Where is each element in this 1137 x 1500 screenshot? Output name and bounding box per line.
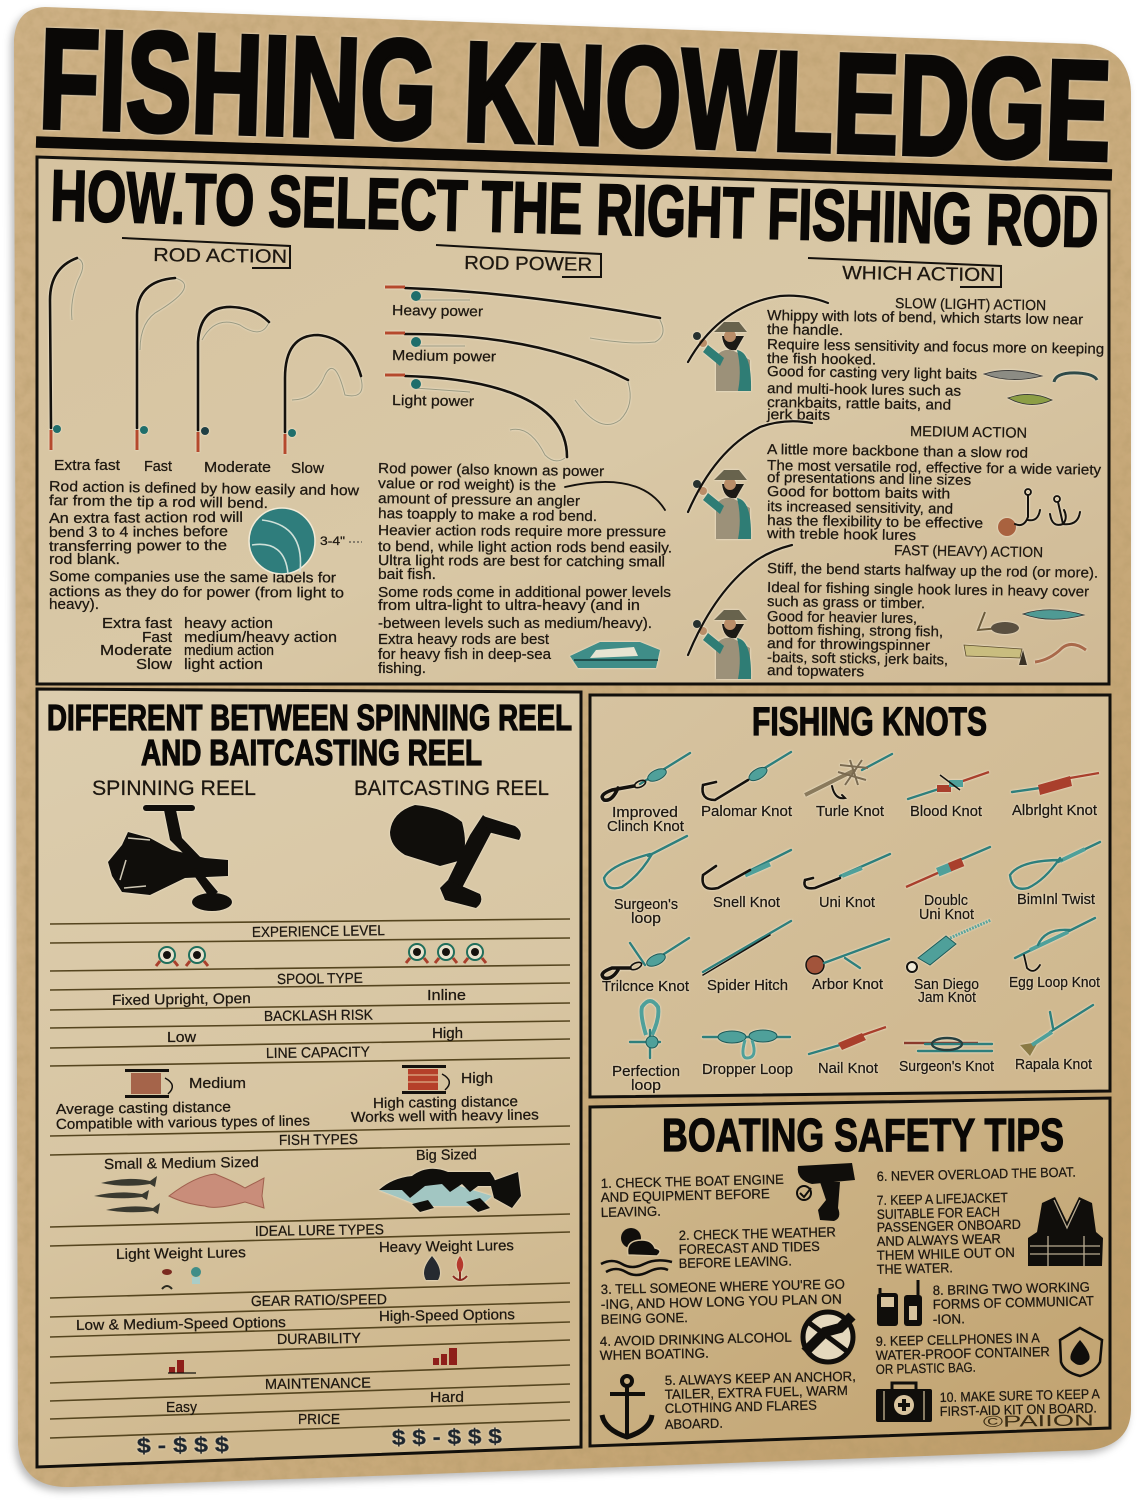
knot: improved clinch: Clinch Knot bbox=[607, 819, 684, 835]
knot: surgeon's loop bbox=[604, 836, 687, 927]
knot: arbor bbox=[806, 939, 889, 993]
knot: spider hitch bbox=[703, 921, 791, 994]
tip 7: AND ALWAYS WEAR bbox=[877, 1231, 1001, 1249]
text: rod power description: Some rods come in additional power levels bbox=[378, 585, 671, 601]
knot: palomar bbox=[701, 752, 792, 820]
row: price: $ $ - $ $ $ bbox=[392, 1425, 502, 1450]
panel: fishing knots bbox=[590, 695, 1110, 1097]
sub-panel: rod action bbox=[49, 238, 362, 673]
knot: rapala bbox=[1015, 1005, 1093, 1073]
row: ideal lure types bbox=[116, 1222, 514, 1289]
icon: medals bbox=[156, 944, 486, 966]
tip 7: SUITABLE FOR EACH bbox=[877, 1204, 1000, 1222]
tip 3: -ING, AND HOW LONG YOU PLAN ON bbox=[601, 1292, 842, 1312]
knot: egg loop: Egg Loop Knot bbox=[1009, 975, 1100, 991]
row: line capacity: Average casting distance bbox=[56, 1100, 231, 1118]
knot: bimini twist bbox=[1010, 842, 1100, 908]
knot: palomar: Palomar Knot bbox=[701, 804, 792, 820]
text: slow action: jerk baits bbox=[766, 407, 830, 424]
row: line capacity: LINE CAPACITY bbox=[266, 1045, 370, 1062]
icon: anchor bbox=[602, 1376, 652, 1437]
knot: surgeon's bbox=[899, 1038, 994, 1075]
row: line capacity: High casting distance bbox=[373, 1094, 518, 1112]
text: rod action description: Some companies use the same labels for bbox=[49, 569, 336, 587]
knot: snell bbox=[703, 850, 791, 911]
tip 7: PASSENGER ONBOARD bbox=[877, 1217, 1021, 1235]
tip 7 bbox=[877, 1190, 1103, 1277]
tip 9: 9. KEEP CELLPHONES IN A bbox=[876, 1330, 1040, 1349]
knot: san diego jam bbox=[907, 920, 991, 1006]
tip 2 bbox=[601, 1224, 836, 1275]
knot: nail bbox=[809, 1027, 886, 1077]
text: rod power description: fishing. bbox=[378, 661, 426, 677]
tip 2: FORECAST AND TIDES bbox=[679, 1239, 820, 1257]
knot: egg loop bbox=[1009, 918, 1100, 991]
row: spool type: SPOOL TYPE bbox=[277, 971, 363, 988]
panel: spinning vs baitcasting reel bbox=[37, 689, 581, 1467]
icon: spinning reel bbox=[108, 805, 232, 911]
rod labels: Slow bbox=[291, 461, 325, 477]
table: action equivalents bbox=[100, 616, 337, 673]
knot: double uni: Uni Knot bbox=[919, 907, 974, 923]
row: line capacity: Medium bbox=[189, 1076, 246, 1092]
icon: outboard motor bbox=[797, 1163, 855, 1221]
text: medium action: with treble hook lures bbox=[766, 526, 916, 544]
tip 2: BEFORE LEAVING. bbox=[679, 1253, 792, 1271]
tip 10 bbox=[876, 1383, 1100, 1422]
row: durability: DURABILITY bbox=[277, 1331, 361, 1348]
tip 5: TAILER, EXTRA FUEL, WARM bbox=[665, 1383, 848, 1402]
text: rod power description: -between levels such as medium/heavy). bbox=[378, 616, 652, 632]
knot: rapala: Rapala Knot bbox=[1015, 1057, 1092, 1073]
knot: nail: Nail Knot bbox=[818, 1061, 878, 1077]
chart: four bending rods bbox=[50, 258, 362, 454]
row: maintenance bbox=[166, 1376, 464, 1416]
knot: snell: Snell Knot bbox=[713, 895, 780, 911]
row: ideal lure types: IDEAL LURE TYPES bbox=[255, 1222, 384, 1240]
text: rod action description: Rod action is defined by how easily and how bbox=[49, 479, 360, 499]
knot: double uni bbox=[906, 847, 990, 923]
icon: heavy cover lures bbox=[964, 610, 1086, 665]
tip 5: CLOTHING AND FLARES bbox=[665, 1398, 817, 1416]
row: price bbox=[137, 1412, 502, 1458]
tip 8: -ION. bbox=[933, 1311, 965, 1327]
knot: turle bbox=[805, 754, 892, 820]
knot: albright: Albrlght Knot bbox=[1012, 803, 1097, 819]
tip 6: 6. NEVER OVERLOAD THE BOAT. bbox=[877, 1164, 1076, 1184]
text: rod action description: heavy). bbox=[49, 597, 99, 613]
watermark: Paiion copyright: ©PAIION bbox=[983, 1412, 1094, 1431]
row: experience level: EXPERIENCE LEVEL bbox=[252, 923, 385, 941]
icon: small rod illustration bbox=[565, 482, 665, 510]
text: rod power description: Heavier action rods require more pressure bbox=[378, 523, 666, 541]
tip 3: 3. TELL SOMEONE WHERE YOU'RE GO bbox=[601, 1276, 845, 1297]
knot: blood bbox=[908, 772, 989, 820]
sub-panel: rod power bbox=[378, 245, 672, 677]
text: slow action: crankbaits, rattle baits, and bbox=[767, 395, 951, 414]
heading: different between reels bbox=[47, 697, 572, 773]
row: gear ratio: Low & Medium-Speed Options bbox=[76, 1315, 286, 1334]
icon: high spool bbox=[402, 1065, 449, 1094]
knot: albright bbox=[1012, 773, 1099, 819]
row: maintenance: Hard bbox=[430, 1390, 464, 1406]
icon: light lures bbox=[162, 1267, 201, 1289]
knot: perfection loop: Perfection bbox=[612, 1064, 680, 1080]
table: action equivalents: Fast bbox=[142, 630, 172, 646]
text: medium action: MEDIUM ACTION bbox=[910, 424, 1027, 442]
text: rod power description: for heavy fish in deep-sea bbox=[378, 647, 552, 663]
panel: how to select the right fishing rod bbox=[37, 156, 1109, 684]
heading: which action bbox=[808, 258, 1001, 287]
tip 2: 2. CHECK THE WEATHER bbox=[679, 1224, 836, 1243]
knot: improved clinch: Improved bbox=[612, 805, 678, 821]
icon: big fish bbox=[379, 1169, 521, 1212]
tip 10: FIRST-AID KIT ON BOARD. bbox=[940, 1400, 1097, 1419]
table: action equivalents: Slow bbox=[136, 657, 173, 673]
rod labels: Fast bbox=[144, 459, 172, 475]
column heading: baitcasting reel: BAITCASTING REEL bbox=[354, 777, 549, 800]
row: fish types bbox=[94, 1132, 521, 1214]
text: medium action: of presentations and line sizes bbox=[767, 470, 971, 489]
icon: life jacket bbox=[1028, 1197, 1103, 1266]
text: slow action bbox=[766, 296, 1104, 424]
text: medium action: The most versatile rod, effective for a wide variety bbox=[767, 458, 1102, 479]
heading: rod power: ROD POWER bbox=[464, 253, 592, 276]
rod labels: Extra fast bbox=[54, 458, 120, 474]
knot: dropper loop bbox=[702, 1030, 793, 1078]
table: action equivalents: Extra fast bbox=[102, 616, 172, 632]
knot: bimini twist: BimInl Twist bbox=[1017, 892, 1095, 908]
text: slow action: and multi-hook lures such as bbox=[767, 381, 961, 400]
text: medium action: its increased sensitivity, and bbox=[767, 499, 953, 518]
row: gear ratio: GEAR RATIO/SPEED bbox=[251, 1292, 387, 1310]
icon: low bars bbox=[168, 1360, 196, 1373]
rod power labels: Heavy power bbox=[392, 303, 483, 320]
icon: first aid kit bbox=[876, 1383, 932, 1422]
row: backlash risk: BACKLASH RISK bbox=[264, 1007, 373, 1025]
heading: rod power bbox=[436, 245, 601, 277]
text: rod power description: has toapply to make a rod bend. bbox=[378, 506, 597, 525]
knot: surgeon's: Surgeon's Knot bbox=[899, 1059, 994, 1075]
row: fish types: FISH TYPES bbox=[279, 1132, 358, 1149]
text: fast action: and topwaters bbox=[767, 663, 864, 680]
icon: rod tip bend diagram: 3-4" bbox=[320, 534, 345, 548]
icon: baitcasting reel bbox=[390, 805, 521, 908]
tip 4: WHEN BOATING. bbox=[600, 1346, 709, 1363]
rod labels bbox=[54, 458, 325, 477]
heading: different between reels: AND BAITCASTING REEL bbox=[141, 732, 482, 773]
text: rod action description bbox=[49, 479, 360, 613]
row: maintenance: Easy bbox=[166, 1400, 198, 1416]
tip 8: 8. BRING TWO WORKING bbox=[933, 1279, 1090, 1298]
text: rod action description: bend 3 to 4 inches before bbox=[49, 524, 228, 541]
row: line capacity: High bbox=[461, 1071, 493, 1087]
row: fish types: Big Sized bbox=[416, 1147, 477, 1164]
knot: dropper loop: Dropper Loop bbox=[702, 1062, 793, 1078]
row: gear ratio: High-Speed Options bbox=[379, 1307, 515, 1325]
tip 8 bbox=[877, 1279, 1094, 1327]
heading: fishing knots: FISHING KNOTS bbox=[752, 700, 987, 744]
tip 7: 7. KEEP A LIFEJACKET bbox=[877, 1190, 1008, 1208]
text: slow action: Whippy with lots of bend, which starts low near bbox=[767, 308, 1083, 328]
chart: three power rods bbox=[385, 287, 663, 461]
text: rod action description: actions as they do for power (from light to bbox=[49, 584, 344, 602]
icon: small fish bbox=[94, 1176, 160, 1214]
icon: weather and waves bbox=[601, 1228, 672, 1275]
text: fast action: Stiff, the bend starts halfway up the rod (or more). bbox=[767, 561, 1098, 582]
text: medium action: A little more backbone than a slow rod bbox=[767, 442, 1028, 462]
row: fish types: Small & Medium Sized bbox=[104, 1155, 259, 1173]
sub-panel: which action bbox=[688, 258, 1104, 680]
text: medium action bbox=[766, 424, 1102, 544]
text: slow action: the handle. bbox=[767, 322, 843, 339]
table: action equivalents: medium action bbox=[184, 643, 274, 659]
text: slow action: SLOW (LIGHT) ACTION bbox=[895, 296, 1046, 314]
tip 5: ABOARD. bbox=[665, 1416, 723, 1432]
tip 9 bbox=[876, 1328, 1102, 1377]
icon: boat bbox=[570, 642, 660, 668]
text: fast action bbox=[767, 543, 1098, 680]
text: medium action: Good for bottom baits with bbox=[767, 484, 950, 503]
tip 9: OR PLASTIC BAG. bbox=[876, 1360, 976, 1377]
icon: crankbait lures bbox=[984, 370, 1097, 405]
tip 3 bbox=[601, 1276, 845, 1327]
text: fast action: -baits, soft sticks, jerk baits, bbox=[767, 650, 948, 669]
text: rod action description: transferring power to the bbox=[49, 538, 227, 555]
knot: san diego jam: Jam Knot bbox=[918, 990, 976, 1006]
text: rod power description: to bend, while light action rods bend easily. bbox=[378, 539, 672, 557]
knot: trilene: Trilcnce Knot bbox=[602, 979, 689, 995]
text: rod power description: Extra heavy rods are best bbox=[378, 632, 549, 648]
tip 3: BEING GONE. bbox=[601, 1310, 688, 1327]
rod power labels bbox=[392, 303, 496, 410]
tip 1: 1. CHECK THE BOAT ENGINE bbox=[601, 1172, 784, 1191]
tip 1 bbox=[601, 1163, 855, 1221]
text: slow action: Good for casting very light baits bbox=[767, 364, 977, 383]
text: fast action: such as grass or timber. bbox=[767, 594, 925, 612]
table: action equivalents: Moderate bbox=[100, 643, 172, 659]
title rule bbox=[36, 142, 1112, 175]
knot: turle: Turle Knot bbox=[816, 804, 884, 820]
rod labels: Moderate bbox=[204, 460, 271, 476]
row: price: $ - $ $ $ bbox=[137, 1434, 229, 1458]
icon: water shield bbox=[1060, 1328, 1102, 1376]
icon: heavy lures bbox=[424, 1256, 467, 1280]
row: spool type bbox=[112, 971, 466, 1009]
table: action equivalents: heavy action bbox=[184, 616, 273, 632]
text: fast action: and for throwingspinner bbox=[767, 636, 930, 654]
icon: no alcohol bbox=[803, 1312, 853, 1362]
text: rod action description: far from the tip a rod will bend. bbox=[49, 493, 268, 512]
tip 1: AND EQUIPMENT BEFORE bbox=[601, 1186, 770, 1205]
knot: double uni: Doublc bbox=[924, 893, 968, 909]
table: action equivalents: medium/heavy action bbox=[184, 630, 337, 646]
text: rod power description: bait fish. bbox=[378, 567, 436, 583]
heading: rod action bbox=[122, 238, 290, 268]
row: line capacity bbox=[56, 1045, 539, 1133]
tip 5: 5. ALWAYS KEEP AN ANCHOR, bbox=[665, 1369, 856, 1388]
row: spool type: Fixed Upright, Open bbox=[112, 991, 251, 1009]
text: rod action description: rod blank. bbox=[49, 552, 120, 568]
tip 7: THE WATER. bbox=[877, 1260, 953, 1277]
row: line capacity: Works well with heavy lines bbox=[351, 1107, 539, 1126]
icon: red fish bbox=[169, 1174, 264, 1208]
knot: uni bbox=[804, 854, 890, 911]
row: experience level bbox=[156, 923, 486, 966]
tip 1: LEAVING. bbox=[601, 1204, 661, 1220]
row: backlash risk bbox=[167, 1007, 463, 1046]
text: fast action: Ideal for fishing single hook lures in heavy cover bbox=[767, 580, 1089, 600]
knot: surgeon's loop: loop bbox=[631, 911, 661, 927]
illustration: angler with fast action rod bbox=[688, 545, 792, 679]
text: rod power description: Rod power (also known as power bbox=[378, 461, 604, 480]
text: rod power description: value or rod weight) is the bbox=[378, 476, 556, 494]
comparison rules bbox=[50, 919, 570, 1438]
row: spool type: Inline bbox=[427, 988, 466, 1004]
tip 7: THEM WHILE OUT ON bbox=[877, 1245, 1015, 1263]
row: ideal lure types: Heavy Weight Lures bbox=[379, 1238, 514, 1256]
tip 8: FORMS OF COMMUNICAT bbox=[933, 1293, 1094, 1312]
text: fast action: FAST (HEAVY) ACTION bbox=[894, 543, 1043, 561]
knot: spider hitch: Spider Hitch bbox=[707, 978, 788, 994]
column heading: spinning reel: SPINNING REEL bbox=[92, 777, 256, 800]
rod power labels: Medium power bbox=[392, 348, 496, 365]
text: fast action: bottom fishing, strong fish, bbox=[767, 622, 943, 640]
rod power labels: Light power bbox=[392, 393, 474, 410]
knot: perfection loop: loop bbox=[631, 1078, 661, 1094]
knot: uni: Uni Knot bbox=[819, 895, 875, 911]
row: gear ratio bbox=[76, 1292, 515, 1334]
text: fast action: Good for heavier lures, bbox=[767, 609, 917, 627]
tip 10: 10. MAKE SURE TO KEEP A bbox=[940, 1386, 1100, 1405]
icon: radios bbox=[877, 1280, 922, 1326]
text: rod power description: from ultra-light to ultra-heavy (and in bbox=[378, 598, 640, 614]
knot: improved clinch bbox=[602, 753, 690, 835]
row: line capacity: Compatible with various types of lines bbox=[56, 1113, 310, 1133]
illustration: angler with medium action rod bbox=[688, 421, 812, 539]
row: durability bbox=[168, 1331, 457, 1373]
tip 4: 4. AVOID DRINKING ALCOHOL bbox=[600, 1330, 792, 1349]
text: rod power description: Ultra light rods are best for catching small bbox=[378, 553, 665, 571]
row: backlash risk: Low bbox=[167, 1030, 197, 1046]
knot: blood: Blood Knot bbox=[910, 804, 982, 820]
tip 4 bbox=[600, 1312, 853, 1363]
knot: san diego jam: San Diego bbox=[914, 977, 979, 993]
text: slow action: Require less sensitivity and focus more on keeping bbox=[767, 337, 1104, 358]
table: action equivalents: light action bbox=[184, 657, 263, 673]
heading: rod action: ROD ACTION bbox=[153, 245, 287, 268]
row: backlash risk: High bbox=[432, 1026, 463, 1042]
illustration: angler with slow action rod bbox=[688, 296, 828, 391]
tip 5 bbox=[602, 1369, 856, 1437]
knot: surgeon's loop: Surgeon's bbox=[614, 897, 678, 913]
heading: which action: WHICH ACTION bbox=[842, 263, 995, 286]
icon: high bars bbox=[433, 1348, 457, 1365]
knot: perfection loop bbox=[612, 1001, 680, 1094]
icon: rod tip bend diagram bbox=[249, 508, 362, 574]
icon: treble hooks bbox=[998, 489, 1080, 536]
row: ideal lure types: Light Weight Lures bbox=[116, 1245, 246, 1263]
tip 9: WATER-PROOF CONTAINER bbox=[876, 1344, 1050, 1363]
knot: trilene bbox=[602, 938, 689, 995]
knot: arbor: Arbor Knot bbox=[812, 977, 883, 993]
heading: different between reels: DIFFERENT BETWEEN SPINNING REEL bbox=[47, 697, 572, 738]
panel: boating safety tips bbox=[590, 1098, 1110, 1446]
text: medium action: has the flexibility to be effective bbox=[767, 513, 983, 532]
text: rod power description: amount of pressure an angler bbox=[378, 491, 580, 510]
text: rod power description bbox=[378, 461, 672, 677]
text: rod action description: An extra fast action rod will bbox=[49, 510, 243, 527]
row: maintenance: MAINTENANCE bbox=[265, 1376, 371, 1393]
icon: medium spool bbox=[125, 1069, 172, 1098]
text: slow action: the fish hooked. bbox=[767, 351, 876, 369]
row: price: PRICE bbox=[298, 1412, 340, 1428]
